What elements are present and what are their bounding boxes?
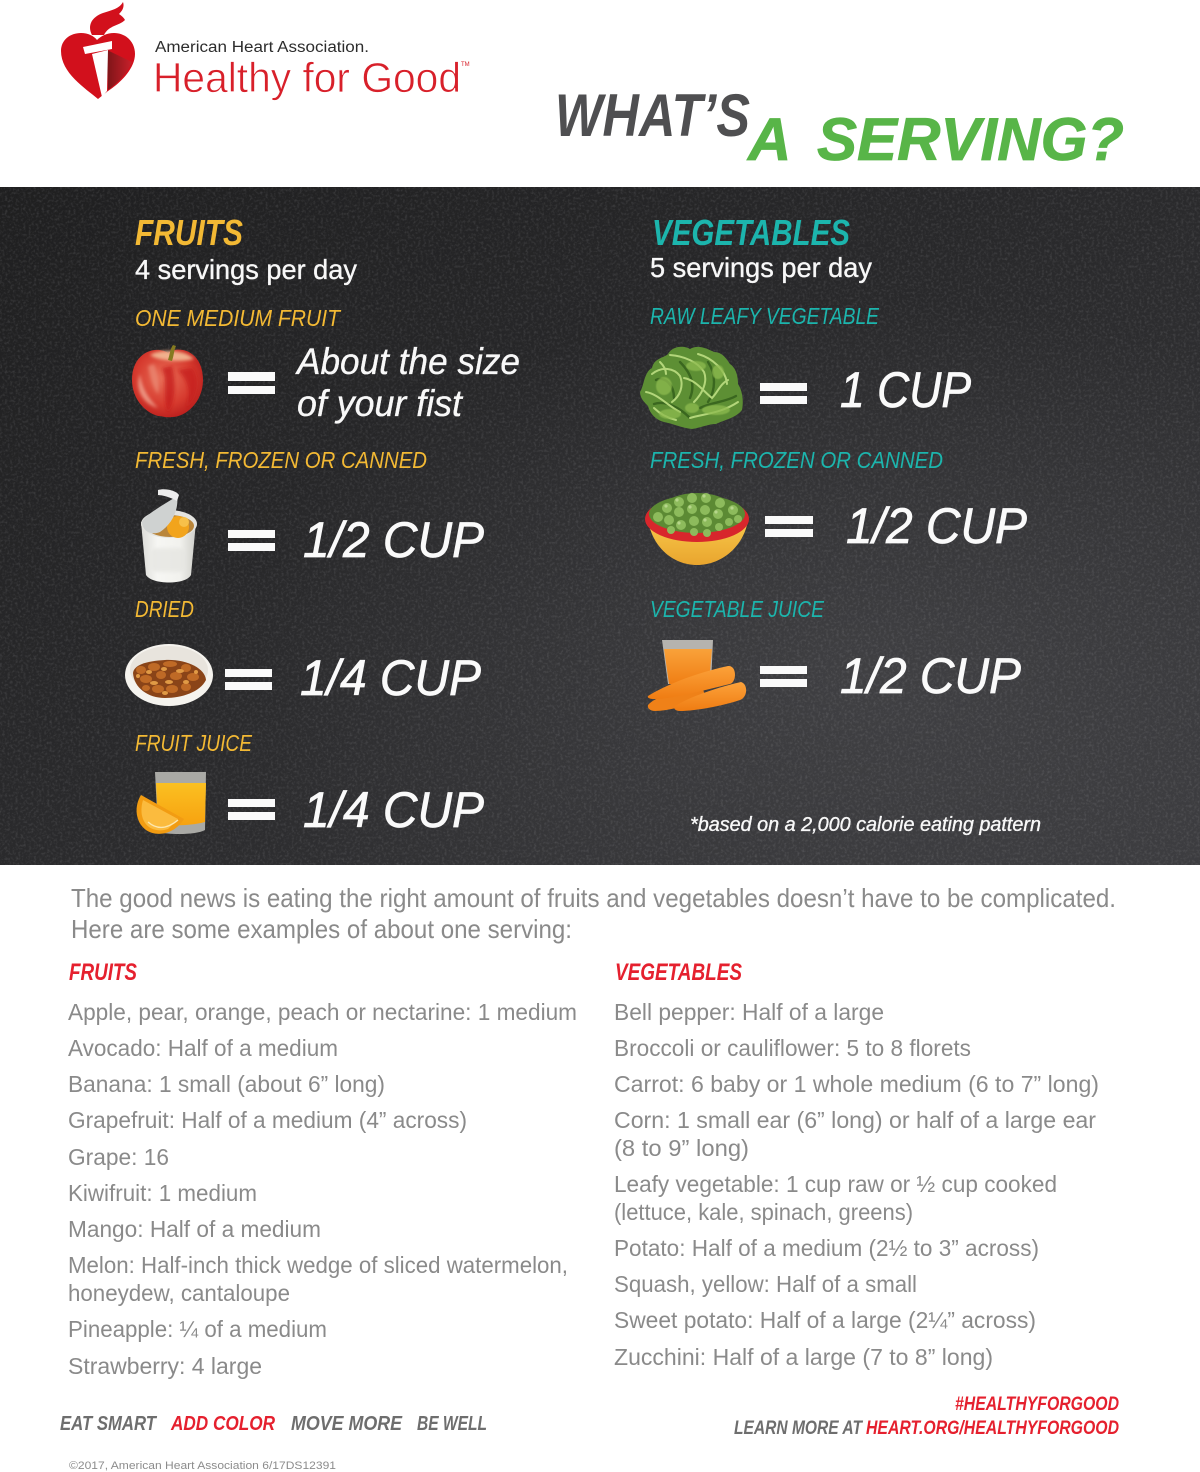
list: vegetable examples: Zucchini: Half of a large (7 to 8” long) bbox=[614, 1344, 993, 1370]
icon: bowl of raisins bbox=[125, 644, 213, 706]
equals sign bbox=[760, 666, 807, 687]
title: A bbox=[746, 106, 791, 173]
icon: can of fruit bbox=[141, 489, 197, 582]
list: fruit examples: Kiwifruit: 1 medium bbox=[68, 1180, 257, 1206]
footer: tagline: ADD COLOR bbox=[170, 1413, 275, 1435]
footnote: calorie pattern: *based on a 2,000 calorie eating pattern bbox=[690, 814, 1041, 836]
label: fruit juice: FRUIT JUICE bbox=[135, 730, 253, 756]
list: fruit examples: Pineapple: ¼ of a medium bbox=[68, 1316, 327, 1342]
equals sign bbox=[228, 530, 275, 551]
icon: heart and torch bbox=[61, 2, 135, 99]
footer: tagline bbox=[60, 1413, 487, 1435]
text: one half cup: 1/2 CUP bbox=[303, 512, 485, 568]
list: fruit examples: Avocado: Half of a medium bbox=[68, 1035, 338, 1061]
text: intro paragraph: The good news is eating the right amount of fruits and vegetables doesn’t have to be complicated. bbox=[71, 883, 1116, 913]
text: one cup: 1 CUP bbox=[840, 362, 972, 418]
footer: tagline: BE WELL bbox=[417, 1413, 487, 1435]
label: fresh frozen or canned: FRESH, FROZEN OR CANNED bbox=[650, 447, 943, 473]
panel: vegetables servings bbox=[640, 212, 1041, 836]
title: WHAT’S bbox=[555, 82, 750, 149]
equals sign bbox=[228, 372, 275, 394]
text: about the size of your fist: of your fist bbox=[297, 383, 464, 424]
list: vegetable examples: Bell pepper: Half of a large bbox=[614, 999, 884, 1025]
label: vegetable juice: VEGETABLE JUICE bbox=[650, 596, 825, 622]
text: one half cup: 1/2 CUP bbox=[840, 648, 1022, 704]
footer: tagline: MOVE MORE bbox=[291, 1413, 403, 1435]
equals sign bbox=[765, 516, 813, 537]
footer: hashtag and website: LEARN MORE AT bbox=[734, 1418, 863, 1439]
label: dried: DRIED bbox=[135, 596, 194, 622]
equals sign bbox=[760, 383, 807, 404]
list: vegetable examples: Squash, yellow: Half of a small bbox=[614, 1271, 917, 1297]
label: raw leafy vegetable: RAW LEAFY VEGETABLE bbox=[650, 303, 880, 329]
list: vegetable examples: Broccoli or cauliflower: 5 to 8 florets bbox=[614, 1035, 971, 1061]
icon: lettuce bbox=[640, 347, 743, 429]
list: fruit examples: Banana: 1 small (about 6” long) bbox=[68, 1071, 385, 1097]
equals sign bbox=[228, 799, 275, 820]
list: vegetable examples bbox=[614, 959, 1099, 1370]
panel: fruits servings bbox=[125, 212, 520, 838]
heading: fruits: FRUITS bbox=[69, 959, 137, 986]
text: one quarter cup: 1/4 CUP bbox=[300, 650, 482, 706]
label: one medium fruit: ONE MEDIUM FRUIT bbox=[135, 305, 342, 331]
text: intro paragraph bbox=[71, 883, 1116, 944]
list: vegetable examples: (lettuce, kale, spinach, greens) bbox=[614, 1199, 913, 1225]
label: fresh frozen or canned: FRESH, FROZEN OR CANNED bbox=[135, 447, 427, 473]
text: vegetable servings per day: 5 servings per day bbox=[650, 252, 872, 283]
copyright: ©2017, American Heart Association 6/17DS12391 bbox=[69, 1460, 336, 1472]
list: fruit examples bbox=[68, 959, 577, 1379]
wordmark: American Heart Association: American Heart Association. bbox=[155, 39, 369, 56]
text: one quarter cup: 1/4 CUP bbox=[303, 782, 485, 838]
icon: carrot juice and carrots bbox=[648, 640, 746, 711]
list: fruit examples: Grape: 16 bbox=[68, 1144, 169, 1170]
text: about the size of your fist bbox=[295, 341, 520, 424]
heading: vegetables: VEGETABLES bbox=[615, 959, 742, 986]
logo: American Heart Association Healthy for Good bbox=[61, 2, 470, 101]
list: vegetable examples: Carrot: 6 baby or 1 whole medium (6 to 7” long) bbox=[614, 1071, 1099, 1097]
list: fruit examples: honeydew, cantaloupe bbox=[68, 1280, 290, 1306]
footer: hashtag and website: #HEALTHYFORGOOD bbox=[955, 1394, 1119, 1415]
list: fruit examples: Mango: Half of a medium bbox=[68, 1216, 321, 1242]
list: fruit examples: Grapefruit: Half of a medium (4” across) bbox=[68, 1107, 467, 1133]
list: vegetable examples: (8 to 9” long) bbox=[614, 1135, 749, 1161]
footer: hashtag and website: HEART.ORG/HEALTHYFORGOOD bbox=[866, 1418, 1119, 1439]
text: one half cup: 1/2 CUP bbox=[846, 498, 1028, 554]
footer: tagline: EAT SMART bbox=[60, 1413, 157, 1435]
panel: dark chalkboard bbox=[0, 187, 1200, 865]
footer: hashtag and website bbox=[734, 1394, 1119, 1439]
list: fruit examples: Melon: Half-inch thick wedge of sliced watermelon, bbox=[68, 1252, 568, 1278]
heading: vegetables: VEGETABLES bbox=[652, 212, 850, 253]
list: vegetable examples: Corn: 1 small ear (6” long) or half of a large ear bbox=[614, 1107, 1096, 1133]
text: fruit servings per day: 4 servings per day bbox=[135, 254, 357, 285]
icon: orange juice and slice bbox=[137, 772, 206, 834]
trademark: TM bbox=[461, 62, 470, 68]
list: fruit examples: Strawberry: 4 large bbox=[68, 1353, 262, 1379]
list: fruit examples: Apple, pear, orange, peach or nectarine: 1 medium bbox=[68, 999, 577, 1025]
icon: apple bbox=[132, 345, 203, 417]
title bbox=[555, 82, 1124, 173]
icon: bowl of peas bbox=[645, 493, 749, 565]
text: intro paragraph: Here are some examples of about one serving: bbox=[71, 914, 572, 944]
equals sign bbox=[225, 669, 272, 690]
wordmark: Healthy for Good: Healthy for Good bbox=[153, 54, 461, 101]
title: SERVING? bbox=[817, 106, 1124, 173]
list: vegetable examples: Sweet potato: Half of a large (2¼” across) bbox=[614, 1307, 1036, 1333]
text: about the size of your fist: About the size bbox=[295, 341, 520, 382]
list: vegetable examples: Leafy vegetable: 1 cup raw or ½ cup cooked bbox=[614, 1171, 1057, 1197]
heading: fruits: FRUITS bbox=[135, 212, 243, 253]
list: vegetable examples: Potato: Half of a medium (2½ to 3” across) bbox=[614, 1235, 1039, 1261]
